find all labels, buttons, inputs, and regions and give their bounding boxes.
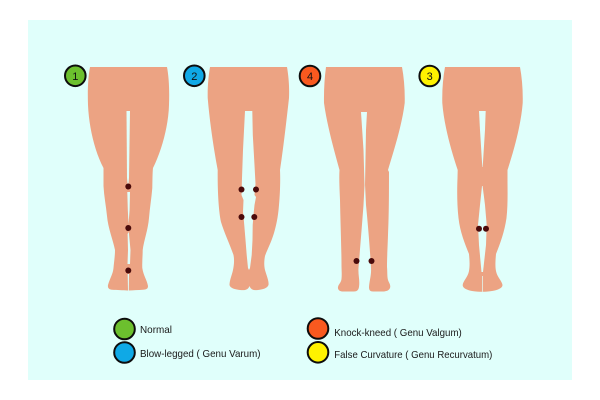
marker dots xyxy=(354,258,374,264)
figure 2: bow legs xyxy=(208,67,289,290)
badge 3: 3 xyxy=(427,71,433,83)
marker dots xyxy=(476,226,489,232)
figure 4: knock knees xyxy=(324,67,405,292)
legend: normal xyxy=(114,319,172,339)
legend: false curvature xyxy=(308,342,492,363)
badge 4: 4 xyxy=(307,71,313,83)
badge 2 xyxy=(184,66,205,86)
marker dots xyxy=(238,186,259,220)
marker dots xyxy=(125,184,131,274)
legend: knock-kneed: Knock-kneed ( Genu Valgum) xyxy=(334,327,462,339)
legend: knock-kneed xyxy=(308,318,462,339)
legend: blow-legged xyxy=(114,342,260,363)
legend: blow-legged: Blow-legged ( Genu Varum) xyxy=(140,348,260,360)
figure 1: normal legs xyxy=(88,67,169,290)
legend: normal: Normal xyxy=(140,324,172,336)
badge 4 xyxy=(300,66,320,86)
badge 1: 1 xyxy=(72,71,78,83)
badge 2: 2 xyxy=(191,71,197,83)
legend: false curvature: False Curvature ( Genu Recurvatum) xyxy=(334,349,492,361)
figure 3: false curvature xyxy=(442,67,523,292)
badge 3 xyxy=(419,66,440,86)
badge 1 xyxy=(65,66,86,86)
